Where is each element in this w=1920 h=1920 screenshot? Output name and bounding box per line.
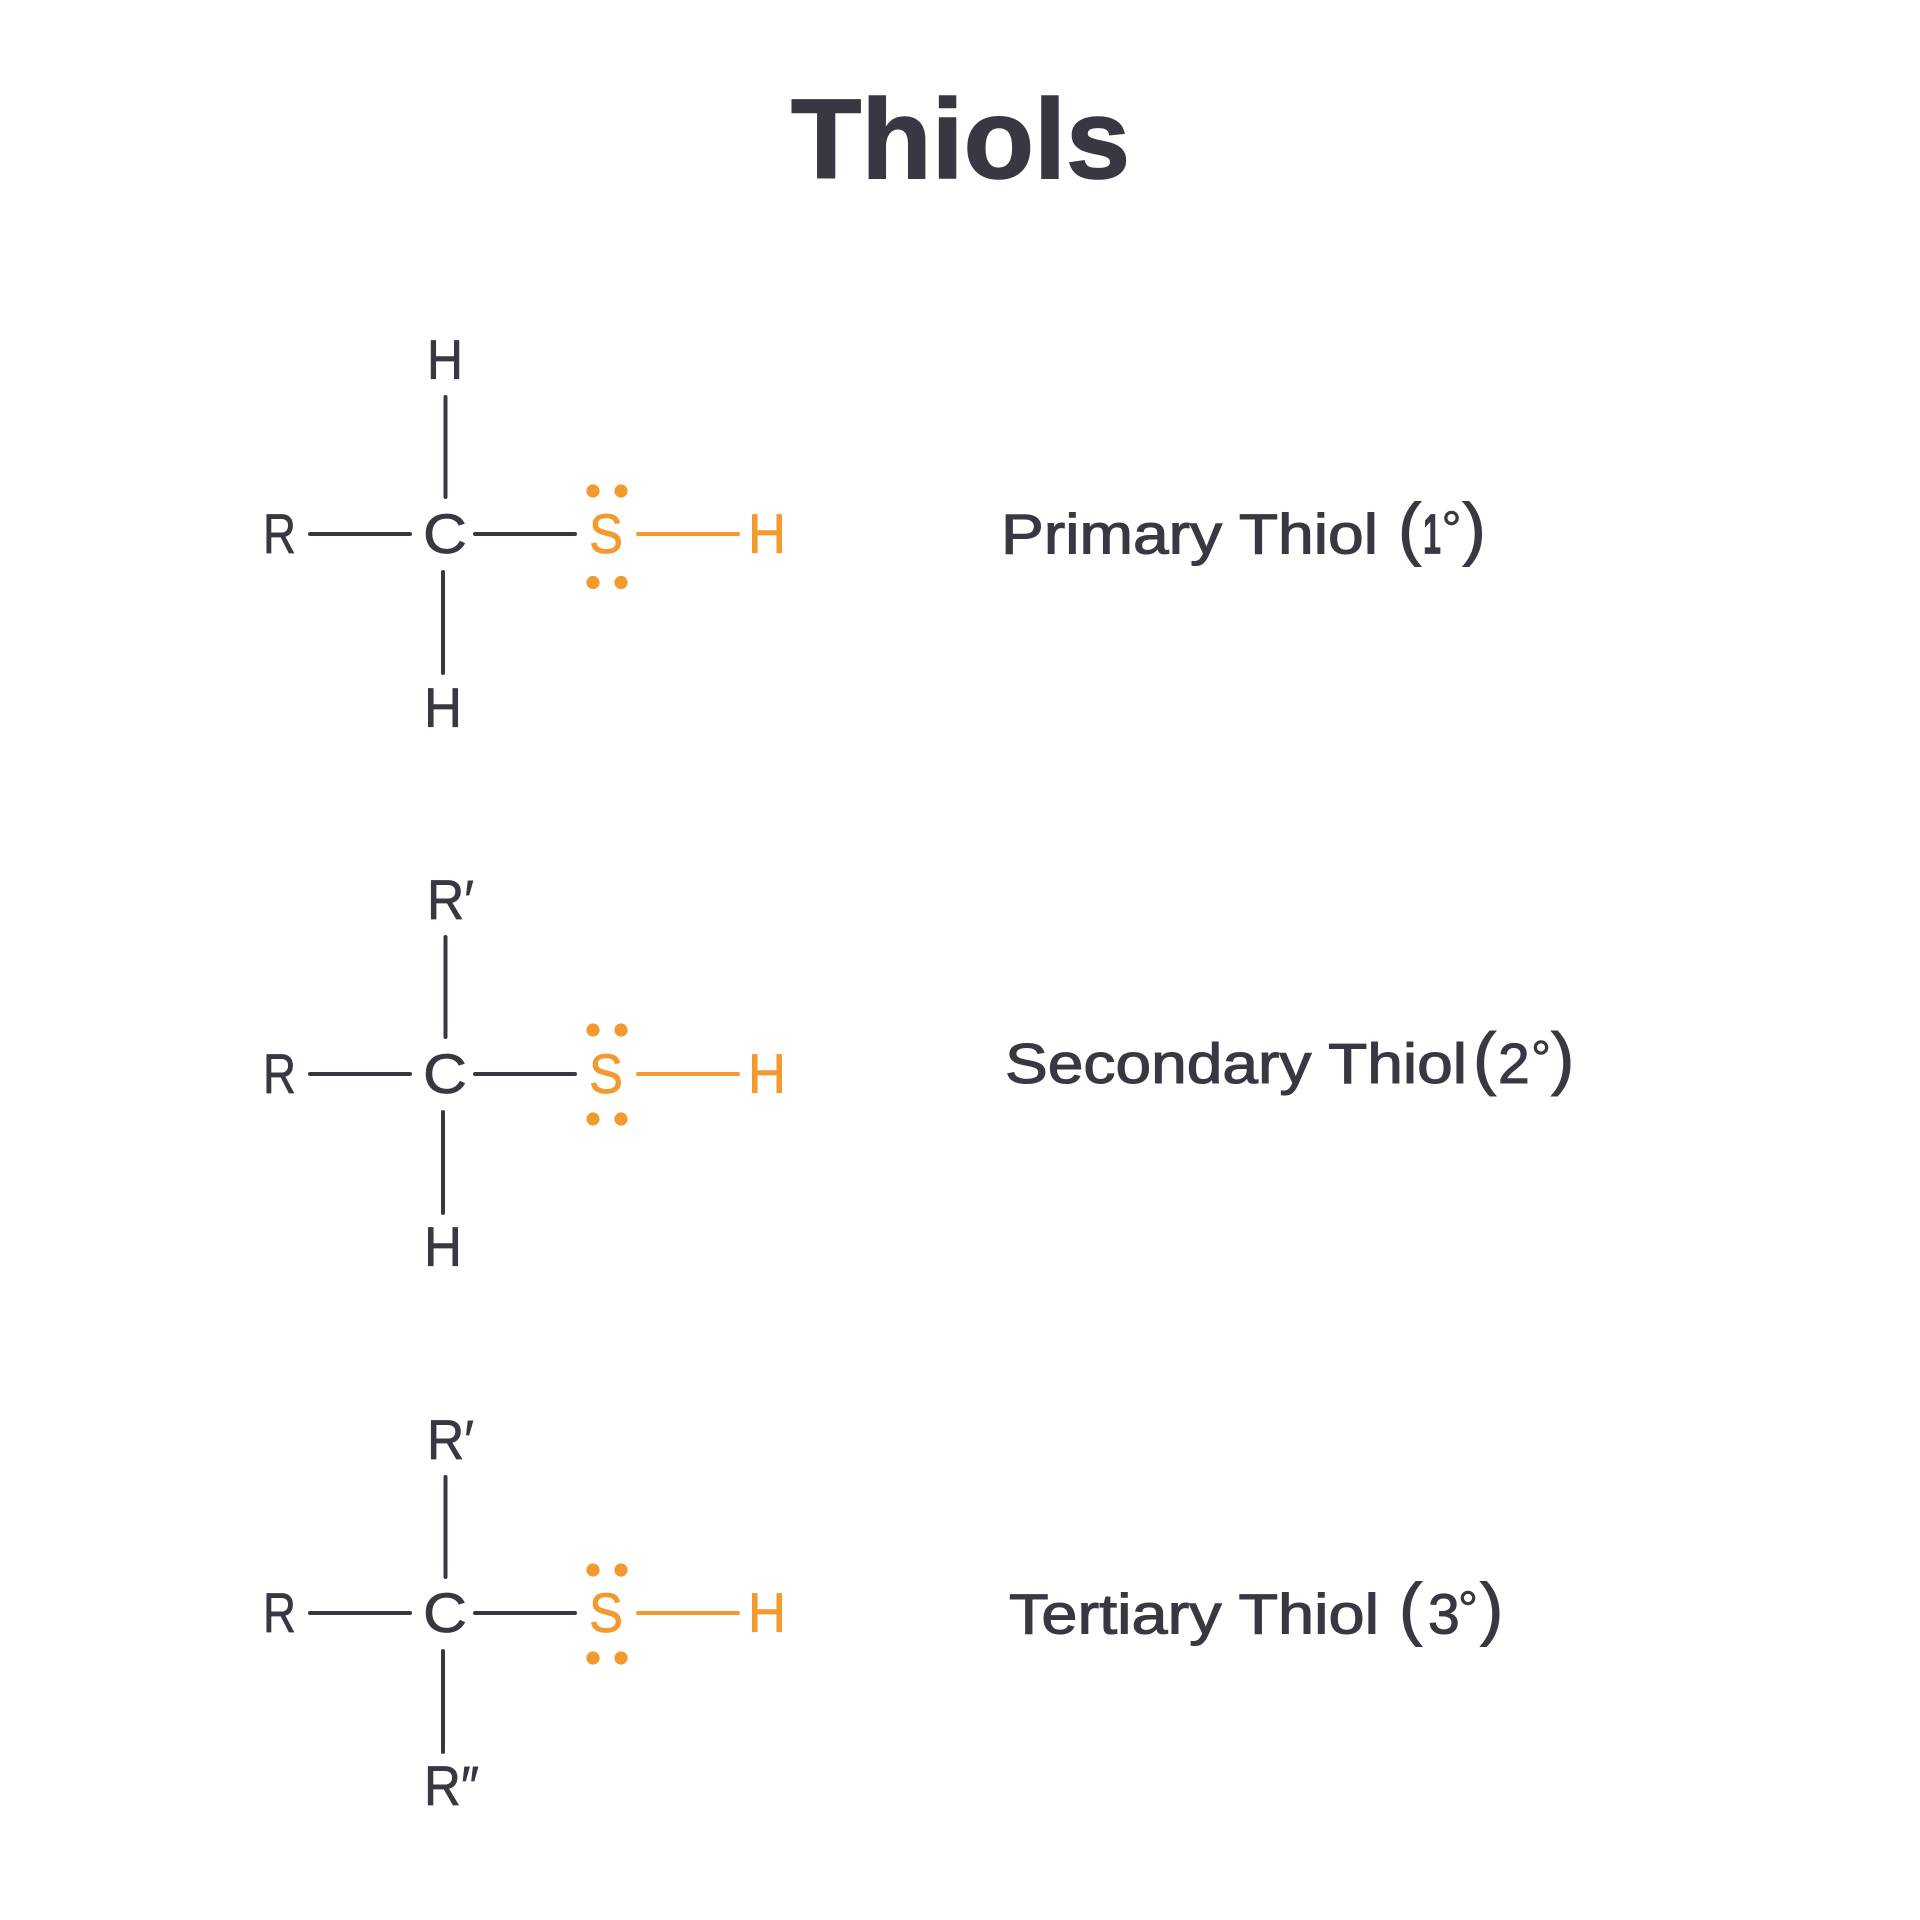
bond: C to S [475, 1611, 575, 1615]
atom: S: S [589, 1042, 623, 1105]
atom: R: R [263, 502, 296, 565]
bond: bottom [441, 1651, 445, 1752]
bond: R to C [310, 1072, 410, 1076]
bond: C to S [475, 1072, 575, 1076]
lone pairs [586, 484, 628, 589]
atom: S: S [589, 1581, 623, 1644]
lone pairs [586, 1563, 628, 1665]
atom: orange H: H [748, 1042, 786, 1105]
title: Thiols [791, 76, 1130, 202]
atom: bottom R double prime: R″ [424, 1754, 479, 1817]
label: primary thiol: 1 [1423, 502, 1441, 566]
label: secondary thiol: Secondary Thiol [1005, 1032, 1467, 1096]
label: primary thiol: ° [1442, 501, 1462, 557]
atom: bottom H: H [424, 676, 462, 739]
lone pairs [586, 1023, 628, 1126]
label: primary thiol: ) [1462, 489, 1486, 567]
bond: R to C [310, 532, 410, 536]
label: tertiary thiol: ° [1458, 1581, 1478, 1637]
atom: orange H: H [748, 1581, 786, 1644]
bond: bottom [441, 572, 445, 673]
label: secondary thiol: ° [1531, 1030, 1551, 1086]
panel: tertiary thiol structure [263, 1408, 786, 1817]
panel: secondary thiol structure [263, 868, 786, 1278]
label: primary thiol: Primary Thiol [1001, 502, 1378, 566]
bond: S to H [638, 532, 738, 536]
label: secondary thiol: ( [1473, 1018, 1496, 1096]
label: tertiary thiol: ( [1399, 1569, 1422, 1647]
atom: top H: H [427, 328, 463, 391]
bond: C to S [475, 532, 575, 536]
atom: C: C [423, 1042, 467, 1105]
atom: top R prime: R′ [427, 868, 474, 931]
atom: C: C [423, 502, 467, 565]
bond: bottom [441, 1112, 445, 1213]
bond: top [444, 937, 448, 1037]
label: tertiary thiol: Tertiary Thiol [1009, 1582, 1379, 1646]
atom: S: S [589, 502, 623, 565]
label: secondary thiol: 2 [1498, 1032, 1530, 1096]
bond: S to H [638, 1611, 738, 1615]
atom: bottom H: H [424, 1215, 462, 1278]
atom: R: R [263, 1042, 296, 1105]
atom: top R prime: R′ [427, 1408, 474, 1471]
atom: C: C [423, 1581, 467, 1644]
label: primary thiol: ( [1398, 489, 1421, 567]
atom: orange H: H [748, 502, 786, 565]
bond: top [444, 397, 448, 497]
bond: top [444, 1477, 448, 1577]
bond: R to C [310, 1611, 410, 1615]
atom: R: R [263, 1581, 296, 1644]
label: tertiary thiol: ) [1480, 1569, 1503, 1647]
label: secondary thiol: ) [1551, 1018, 1574, 1096]
panel: primary thiol structure [263, 328, 786, 739]
bond: S to H [638, 1072, 738, 1076]
label: tertiary thiol: 3 [1428, 1582, 1460, 1646]
